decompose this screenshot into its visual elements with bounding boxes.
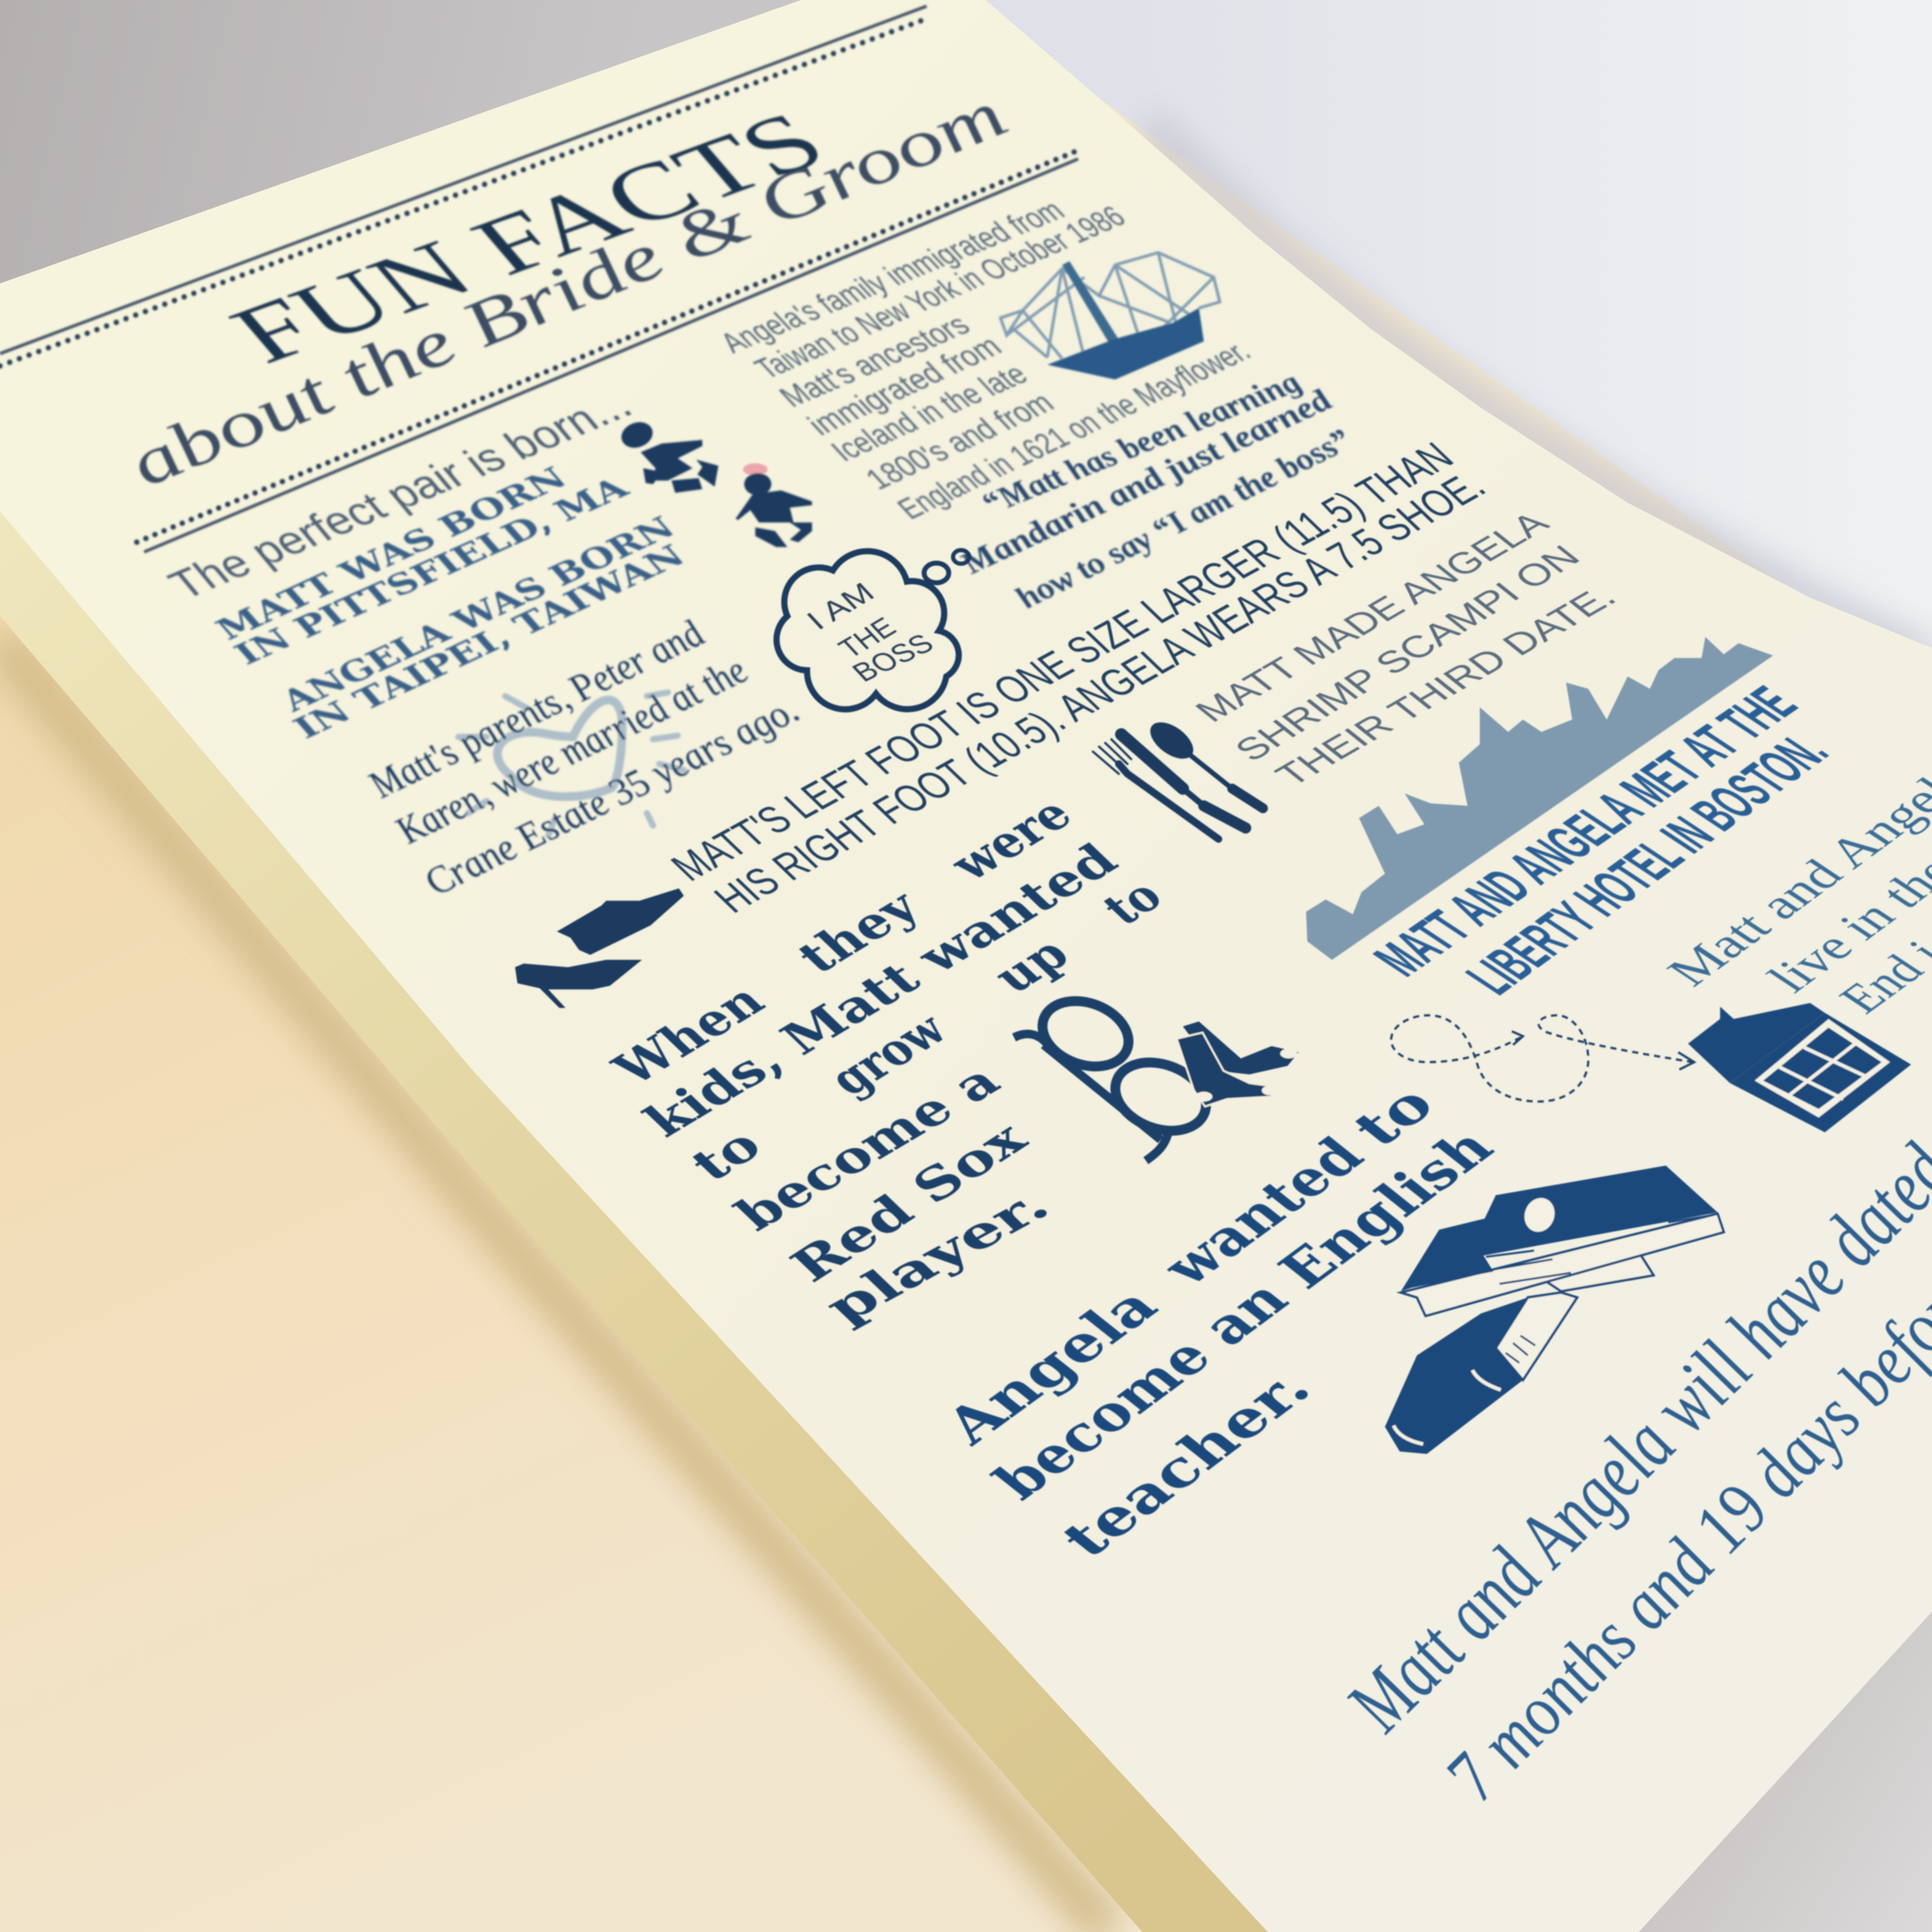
ancestry text: 1800's and from [858,386,1061,496]
line: to grow up to: up [981,927,1080,1003]
icon: baby boy [618,417,718,492]
icon: mayflower ship [1001,253,1220,380]
ancestry text: Taiwan to New York in October 1986 [747,200,1133,384]
section: english teacher [930,1075,1724,1568]
ancestry text [713,194,1258,525]
shoe size text: MATT'S LEFT FOOT IS ONE SIZE LARGER (11.5) THAN [661,434,1463,889]
line: When they were: they [785,879,932,983]
subtitle: about the Bride & Groom [108,79,1023,499]
bubble text: THE [832,612,902,664]
line: kids, Matt wanted: kids, Matt wanted [632,833,1129,1147]
icon: men's shoe [557,889,683,955]
bubble text: BOSS [845,628,940,687]
section: boston meeting [1306,637,1842,1004]
shoe size text [661,434,1495,921]
shrimp scampi text [1186,505,1624,792]
birthplace text [208,460,693,745]
section: ancestry [713,194,1362,614]
icon: high heel [515,960,642,1008]
line: to grow up to: grow [817,1002,959,1105]
line: Red Sox: Red Sox [778,1111,1039,1292]
line: Angela wanted to [930,1075,1447,1455]
shrimp scampi text: SHRIMP SCAMPI ON [1226,539,1589,768]
ancestry text: Matt's ancestors [772,309,977,413]
bubble text: I AM [800,577,881,635]
ancestry text: Angela's family immigrated from [713,194,1072,359]
line: When they were: were [938,788,1084,891]
ancestry text: immigrated from [800,329,1009,441]
parents text: Crane Estate 35 years ago. [414,690,809,903]
shrimp scampi text: THEIR THIRD DATE. [1267,579,1624,792]
section: birthplaces [159,382,812,745]
header section [0,6,1078,552]
birthplace text: ANGELA WAS BORN [272,510,683,718]
line: to grow up to: to [679,1118,773,1191]
line: Angela wanted to: Angela [930,1276,1171,1455]
line: to grow up to [679,869,1174,1191]
birthplace text: IN TAIPEI, TAIWAN [286,538,693,745]
ancestry text: England in 1621 on the Mayflower. [890,334,1258,525]
icon: thought bubble [777,550,969,710]
birthplace text: MATT WAS BORN [208,460,575,646]
mandarin quote [950,367,1362,614]
title: FUN FACTS [211,94,845,380]
icon: boston skyline [1306,637,1773,960]
section: home [1391,755,1932,1133]
shoe size text: HIS RIGHT FOOT (10.5). ANGELA WEARS A 7.5 SHOE. [704,463,1495,921]
mandarin quote: “Matt has been learning [972,367,1310,519]
birthplace text: IN PITTSFIELD, MA [227,470,636,672]
meeting text [1359,676,1842,1004]
shrimp scampi text: MATT MADE ANGELA [1186,505,1558,728]
mandarin quote: how to say “I am the boss” [1006,424,1362,614]
section: dinner [1093,505,1624,839]
line: Angela wanted to: wanted [1148,1126,1377,1297]
section: shoes [515,434,1495,1008]
bubble text [800,577,940,687]
line: to grow up to: to [1091,869,1174,934]
line: become a: become a [723,1054,1012,1241]
icon: house [1688,1003,1911,1133]
icon: stacked books [1385,1166,1724,1454]
top double rule [0,6,930,366]
icon: cutlery [1093,715,1263,839]
line: teacher.: teacher. [1048,1358,1324,1568]
ancestry text: Iceland in the late [824,358,1035,467]
icon: red sox B [1014,990,1215,1161]
icon: baby girl [736,463,812,547]
line: When they were: When [601,974,776,1095]
lower double rule [137,150,1078,552]
paper stack side [0,511,1267,1932]
section: parents [358,613,809,903]
line: become an English: become an English [980,1118,1507,1511]
icon: dashed flight path [1391,1015,1694,1102]
parents text: Matt's parents, Peter and [358,613,715,806]
line: Angela wanted to: to [1339,1075,1447,1157]
mandarin quote: Mandarin and just learned [950,384,1342,580]
icon: red socks [1177,1021,1299,1106]
parents text: Karen, were married at the [384,650,758,852]
line: When they were [601,788,1084,1095]
section: red sox ambition [601,788,1299,1333]
icon: heart [459,692,683,836]
intro line: The perfect pair is born... [159,382,642,608]
line: player.: player. [811,1179,1061,1333]
